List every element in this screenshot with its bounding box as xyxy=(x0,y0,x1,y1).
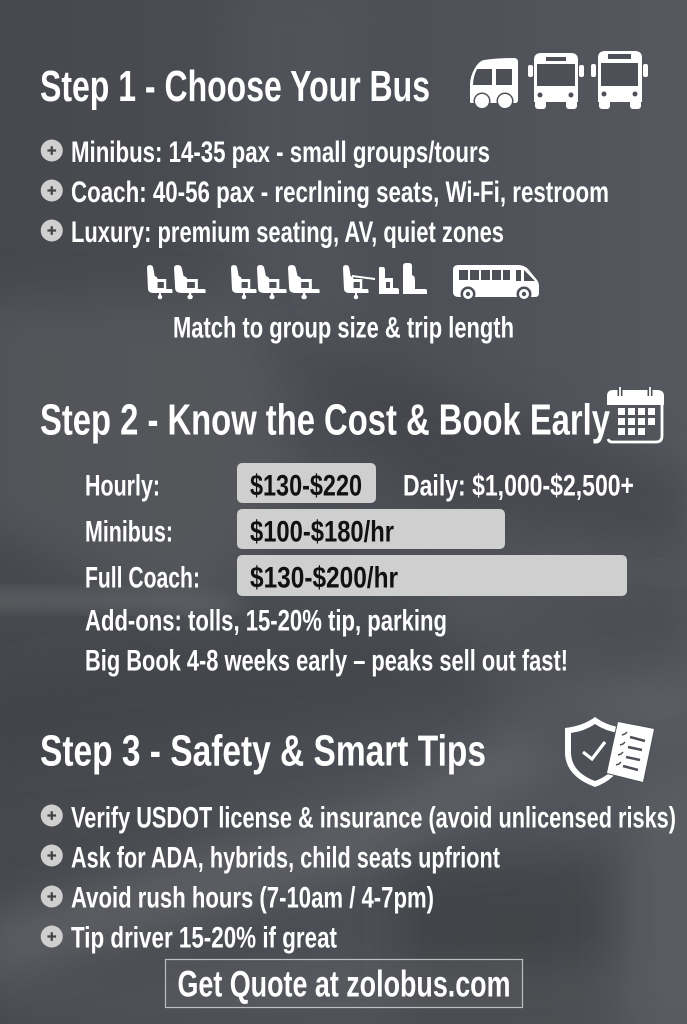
bullet: tip driver: Tip driver 15-20% if great xyxy=(71,922,337,954)
icon: minibus front xyxy=(470,58,518,110)
button: get quote xyxy=(166,960,522,1008)
icon: shield and checklist xyxy=(565,717,654,787)
bullet: luxury: Luxury: premium seating, AV, quiet zones xyxy=(71,216,504,249)
bullet: avoid rush hours xyxy=(41,882,434,914)
row: full coach xyxy=(85,555,627,596)
row: hourly: $130-$220 xyxy=(250,470,362,502)
icon: luxury bus front xyxy=(591,51,648,109)
caption: match to group size: Match to group size & trip length xyxy=(173,312,514,344)
bullet: ask for ADA xyxy=(41,842,500,874)
icon: coach front xyxy=(528,53,584,109)
heading: step 3: Step 3 - Safety & Smart Tips xyxy=(40,726,486,776)
text: add-ons: Add-ons: tolls, 15-20% tip, parking xyxy=(85,604,447,638)
icon: side view bus xyxy=(453,265,539,302)
icon: calendar xyxy=(607,387,664,442)
row: hourly: Hourly: xyxy=(85,470,160,502)
bullet: luxury xyxy=(41,216,504,249)
heading: step 1: Step 1 - Choose Your Bus xyxy=(40,62,430,111)
button: get quote: Get Quote at zolobus.com xyxy=(178,964,510,1004)
bullet: minibus: Minibus: 14-35 pax - small groups/tours xyxy=(71,136,490,169)
row: minibus xyxy=(85,509,505,549)
panel: step 1 choose your bus xyxy=(40,51,648,344)
bullet: avoid rush hours: Avoid rush hours (7-10am / 4-7pm) xyxy=(71,882,434,914)
bullet: ask for ADA: Ask for ADA, hybrids, child seats upfriont xyxy=(71,842,500,874)
bullet: tip driver xyxy=(41,922,337,954)
panel: step 2 cost and booking xyxy=(40,387,664,678)
row: full coach: $130-$200/hr xyxy=(250,562,398,594)
panel: step 3 safety and tips xyxy=(40,717,676,1008)
row: minibus: $100-$180/hr xyxy=(250,516,394,548)
icon: three seats xyxy=(231,265,320,299)
row: hourly xyxy=(85,463,634,503)
row: full coach: Full Coach: xyxy=(85,562,200,594)
icon: premium seats xyxy=(343,263,427,299)
row: minibus: Minibus: xyxy=(85,516,173,548)
icon: two seats xyxy=(147,265,206,299)
